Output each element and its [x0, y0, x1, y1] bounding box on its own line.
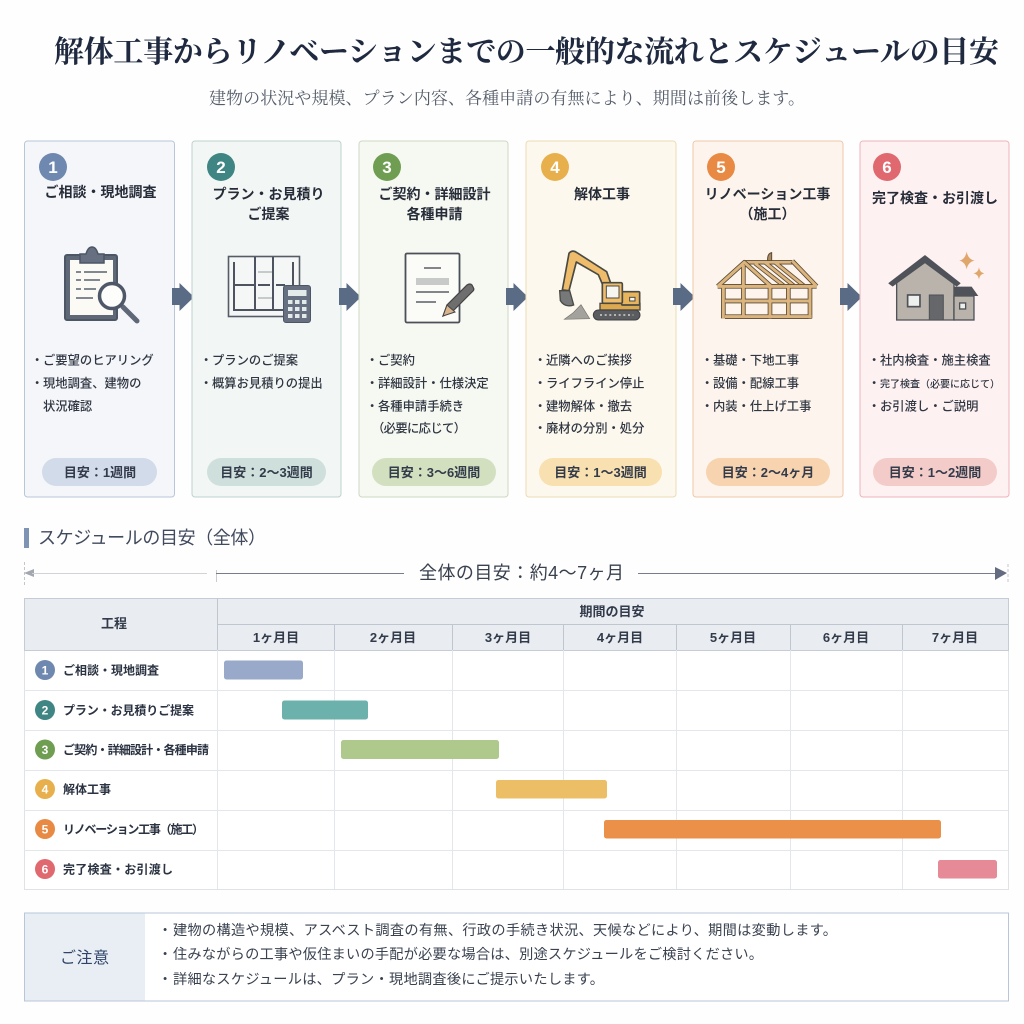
heading: step 4: 解体工事: [574, 186, 630, 202]
duration pill 6: [873, 458, 997, 486]
list: step 1 tasks: ・: [31, 354, 43, 368]
icon: timber frame house: [718, 253, 817, 318]
heading: step 5: （施工）: [740, 206, 796, 222]
icon: floor plan and calculator: [228, 256, 310, 322]
list: step 5 tasks: ・: [701, 376, 713, 390]
row 1: [35, 660, 303, 680]
panel: step 2 plan and estimate: [192, 141, 341, 497]
list: step 3 tasks: 詳細設計・仕様決定: [378, 376, 489, 390]
badge 4: [541, 153, 569, 181]
list: step 6 tasks: 社内検査・施主検査: [880, 352, 991, 368]
row 3: [35, 740, 499, 760]
timeline span arrow: [24, 562, 1008, 585]
callout: notes: [24, 913, 1008, 1001]
icon: clipboard and magnifier: [65, 247, 137, 321]
heading: step 5: リノベーション工事: [705, 186, 830, 202]
arrow 4: [673, 283, 695, 311]
list: step 4 tasks: [534, 352, 645, 436]
list: step 3 tasks: ご契約: [378, 352, 415, 368]
icon: excavator: [560, 251, 640, 320]
panel: step 5 renovation: [693, 141, 843, 497]
duration pill 1: [42, 458, 157, 486]
row 6: [35, 859, 997, 879]
badge 5: 5: [716, 158, 726, 177]
list: step 4 tasks: 近隣へのご挨拶: [546, 352, 632, 368]
notes text: 建物の構造や規模、アスベスト調査の有無、行政の手続き状況、天候などにより、期間は変動します。: [173, 922, 837, 939]
row 4: 4: [42, 782, 49, 796]
list: step 4 tasks: ・: [534, 354, 546, 368]
row 2: [35, 700, 368, 720]
table header: [24, 598, 1008, 650]
notes text: ・: [158, 972, 172, 988]
list: step 6 tasks: ・: [868, 400, 880, 414]
table header: 7ヶ月目: [932, 630, 978, 645]
list: step 5 tasks: 設備・配線工事: [713, 376, 799, 390]
list: step 2 tasks: [200, 352, 323, 390]
notes text: ・: [158, 947, 172, 963]
panel: step 4 demolition: [526, 141, 676, 497]
duration pill 3: 目安：3〜6週間: [388, 465, 480, 480]
list: step 2 tasks: ・: [200, 376, 212, 390]
duration pill 3: [372, 458, 496, 486]
list: step 2 tasks: ・: [200, 354, 212, 368]
list: step 4 tasks: ・: [534, 400, 546, 414]
badge 2: 2: [216, 158, 226, 177]
table header: 1ヶ月目: [253, 630, 299, 645]
heading: step 2: ご提案: [248, 206, 290, 222]
list: step 3 tasks: ・: [366, 376, 378, 390]
row 4: 解体工事: [63, 782, 111, 796]
duration pill 2: 目安：2〜3週間: [220, 465, 313, 480]
badge 1: 1: [48, 158, 58, 177]
notes text: 詳細なスケジュールは、プラン・現地調査後にご提示いたします。: [173, 972, 604, 988]
title: 解体工事からリノベーションまでの一般的な流れとスケジュールの目安: [54, 36, 999, 69]
badge 3: [373, 153, 401, 181]
table header: 6ヶ月目: [823, 630, 869, 645]
arrow 1: [172, 283, 194, 311]
row 5: リノベーション工事（施工）: [63, 822, 204, 836]
list: step 6 tasks: お引渡し・ご説明: [880, 398, 978, 414]
badge 5: [707, 153, 735, 181]
row 4: [35, 779, 607, 799]
duration pill 4: 目安：1〜3週間: [554, 465, 647, 480]
heading: step 3: 各種申請: [406, 206, 462, 222]
list: step 5 tasks: 基礎・下地工事: [713, 352, 799, 368]
list: step 1 tasks: 状況確認: [43, 398, 93, 414]
list: step 3 tasks: ・: [366, 354, 378, 368]
notes text: 住みながらの工事や仮住まいの手配が必要な場合は、別途スケジュールをご検討ください。: [173, 946, 763, 963]
duration pill 6: 目安：1〜2週間: [889, 465, 981, 480]
panel: step 6 inspection and handover: [860, 141, 1009, 497]
heading: step 6: 完了検査・お引渡し: [872, 190, 998, 206]
row 1: 1: [42, 664, 49, 678]
row 6: 6: [42, 862, 49, 876]
icon: document and pencil: [406, 254, 474, 322]
table header: 3ヶ月目: [485, 630, 531, 645]
gantt chart: [24, 598, 1008, 890]
duration pill 5: 目安：2〜4ヶ月: [722, 465, 814, 480]
badge 3: 3: [382, 158, 392, 177]
list: step 1 tasks: ご要望のヒアリング: [43, 352, 154, 368]
row 1: ご相談・現地調査: [63, 662, 159, 678]
panel: step 3 contract and design: [359, 141, 508, 497]
notes text: ・: [158, 923, 172, 939]
subtitle: 建物の状況や規模、プラン内容、各種申請の有無により、期間は前後します。: [209, 89, 805, 108]
panel: step 1 consultation: [24, 141, 174, 497]
row 5: [35, 819, 941, 839]
list: step 1 tasks: [31, 352, 154, 414]
list: step 1 tasks: 現地調査、建物の: [43, 376, 141, 390]
list: step 3 tasks: ・: [366, 400, 378, 414]
heading: step 3: [378, 186, 490, 222]
duration pill 4: [539, 458, 662, 486]
row 3: ご契約・詳細設計・各種申請: [63, 742, 209, 757]
list: step 4 tasks: ・: [534, 376, 546, 390]
badge 4: 4: [550, 158, 560, 177]
notes text: [158, 922, 837, 988]
list: step 3 tasks: 各種申請手続き: [378, 398, 464, 414]
list: step 5 tasks: 内装・仕上げ工事: [713, 398, 811, 414]
list: step 6 tasks: ・: [868, 354, 880, 368]
section heading: overall schedule: スケジュールの目安（全体）: [38, 528, 266, 548]
list: step 6 tasks: [868, 352, 1000, 414]
row 2: 2: [42, 704, 49, 718]
heading: step 1: ご相談・現地調査: [44, 184, 156, 200]
list: step 4 tasks: 廃材の分別・処分: [546, 420, 645, 436]
table header: 2ヶ月目: [370, 630, 416, 645]
heading: step 3: ご契約・詳細設計: [378, 186, 490, 202]
badge 2: [207, 153, 235, 181]
list: step 6 tasks: 完了検査（必要に応じて）: [880, 378, 1000, 390]
badge 1: [39, 153, 67, 181]
list: step 5 tasks: ・: [701, 400, 713, 414]
duration pill 1: 目安：1週間: [64, 465, 136, 480]
list: step 3 tasks: [366, 352, 489, 436]
list: step 2 tasks: 概算お見積りの提出: [212, 376, 323, 390]
arrow 3: [506, 283, 528, 311]
row 6: 完了検査・お引渡し: [63, 862, 173, 876]
list: step 4 tasks: ・: [534, 422, 546, 436]
list: step 1 tasks: ・: [31, 376, 43, 390]
badge 6: 6: [882, 158, 892, 177]
list: step 4 tasks: 建物解体・撤去: [546, 398, 632, 414]
list: step 2 tasks: プランのご提案: [212, 352, 299, 368]
icon: finished house with sparkles: [889, 252, 984, 320]
heading: step 2: プラン・お見積り: [212, 186, 324, 202]
notes label: ご注意: [60, 949, 109, 967]
arrow 2: [339, 283, 361, 311]
table header: 工程: [101, 616, 127, 631]
list: step 4 tasks: ライフライン停止: [546, 376, 644, 390]
duration pill 5: [706, 458, 830, 486]
list: step 5 tasks: ・: [701, 354, 713, 368]
duration pill 2: [207, 458, 326, 486]
row 2: プラン・お見積りご提案: [63, 702, 194, 718]
list: step 6 tasks: ・: [868, 376, 880, 390]
badge 6: [873, 153, 901, 181]
table header: 4ヶ月目: [597, 630, 643, 645]
table header: 5ヶ月目: [710, 630, 756, 645]
timeline label: 全体の目安：約4〜7ヶ月: [419, 563, 624, 583]
list: step 5 tasks: [701, 352, 811, 414]
row 3: 3: [42, 743, 49, 757]
heading: step 5: [705, 186, 830, 222]
arrow 5: [840, 283, 862, 311]
list: step 3 tasks: （必要に応じて）: [372, 422, 466, 436]
heading: step 2: [212, 186, 324, 222]
table header: 期間の目安: [579, 604, 645, 619]
row 5: 5: [42, 822, 49, 836]
